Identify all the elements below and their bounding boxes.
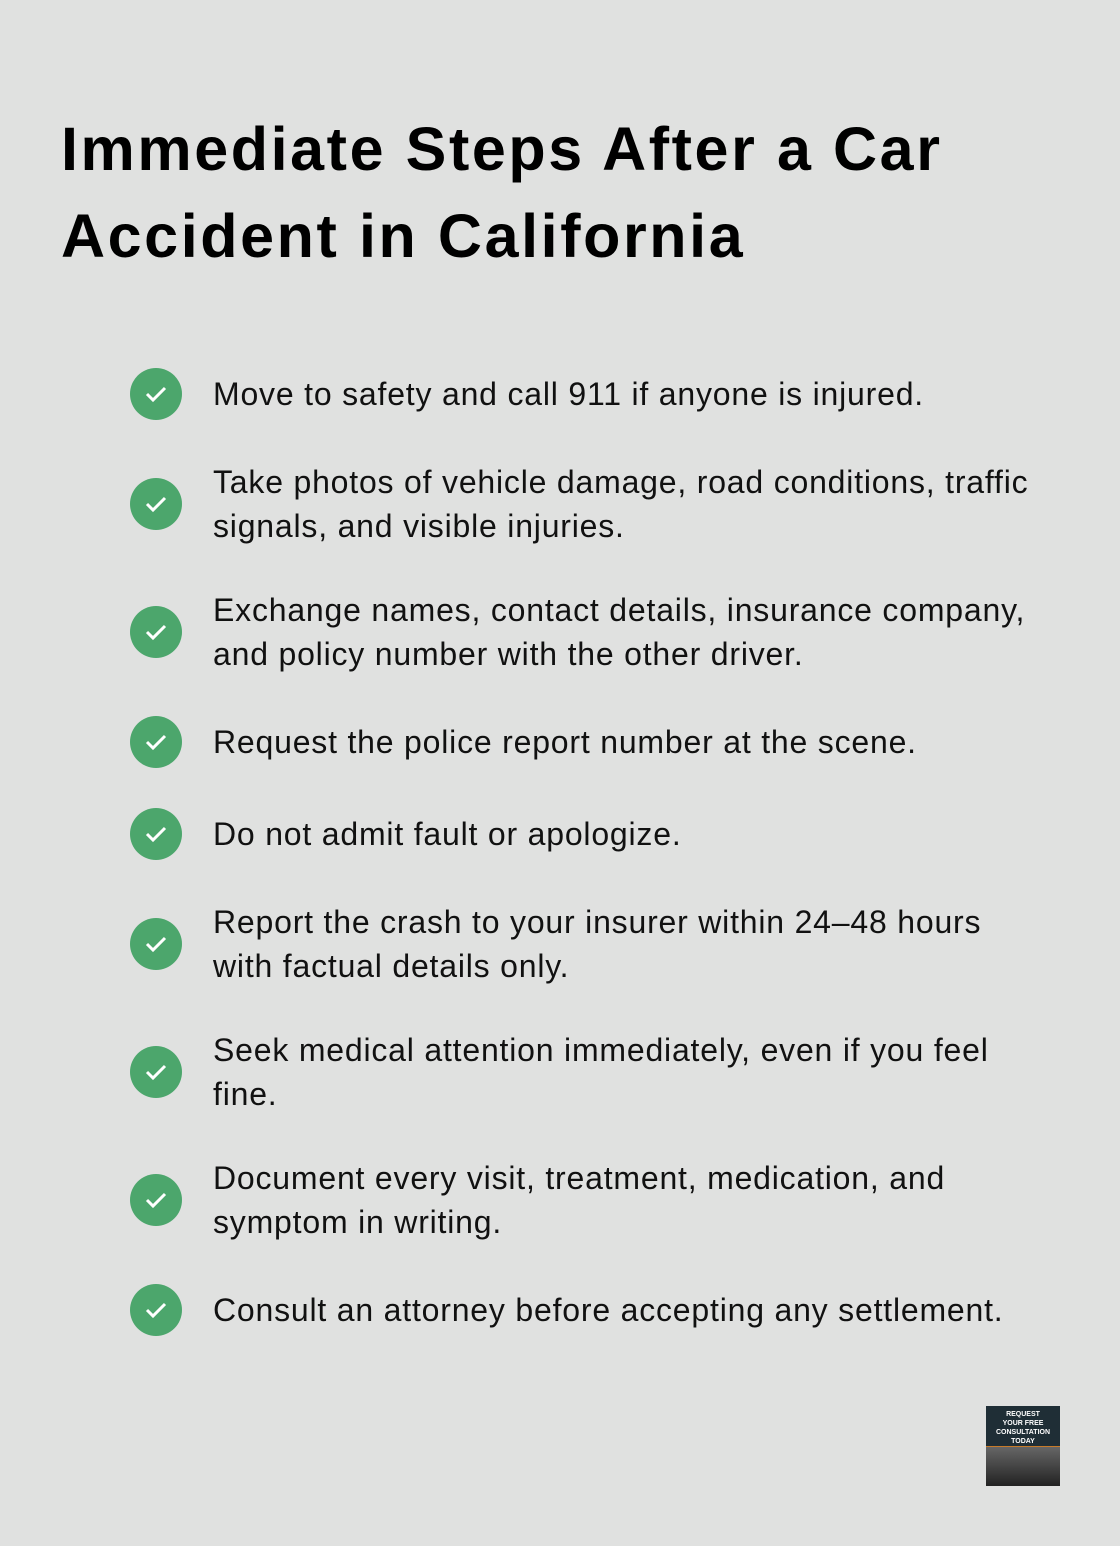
item 7: fine. [213, 1076, 277, 1112]
logo: consultation badge: YOUR FREE [1003, 1420, 1043, 1427]
logo: consultation badge: CONSULTATION [996, 1429, 1050, 1436]
item 1: Move to safety and call 911 if anyone is injured. [213, 376, 924, 412]
item 6: Report the crash to your insurer within 24–48 hours [213, 904, 981, 940]
item 4 [130, 716, 917, 768]
item 3 [130, 592, 1025, 672]
item 2: Take photos of vehicle damage, road conditions, traffic [213, 464, 1028, 500]
item 8: Document every visit, treatment, medication, and [213, 1160, 945, 1196]
item 7: Seek medical attention immediately, even if you feel [213, 1032, 989, 1068]
item 2 [130, 464, 1028, 544]
logo: consultation badge [986, 1406, 1060, 1485]
item 4: Request the police report number at the scene. [213, 724, 917, 760]
title [61, 115, 943, 270]
logo: consultation badge: TODAY [1011, 1438, 1035, 1445]
title: Immediate Steps After a Car [61, 115, 943, 183]
title: Accident in California [61, 202, 745, 270]
item 9: Consult an attorney before accepting any settlement. [213, 1292, 1004, 1328]
item 9 [130, 1284, 1004, 1336]
item 3: and policy number with the other driver. [213, 636, 804, 672]
item 5: Do not admit fault or apologize. [213, 816, 682, 852]
item 1 [130, 368, 924, 420]
item 7 [130, 1032, 989, 1112]
item 6: with factual details only. [213, 948, 569, 984]
item 2: signals, and visible injuries. [213, 508, 625, 544]
item 5 [130, 808, 682, 860]
item 3: Exchange names, contact details, insurance company, [213, 592, 1025, 628]
logo: consultation badge: REQUEST [1006, 1411, 1040, 1418]
item 8: symptom in writing. [213, 1204, 502, 1240]
item 8 [130, 1160, 945, 1240]
item 6 [130, 904, 981, 984]
